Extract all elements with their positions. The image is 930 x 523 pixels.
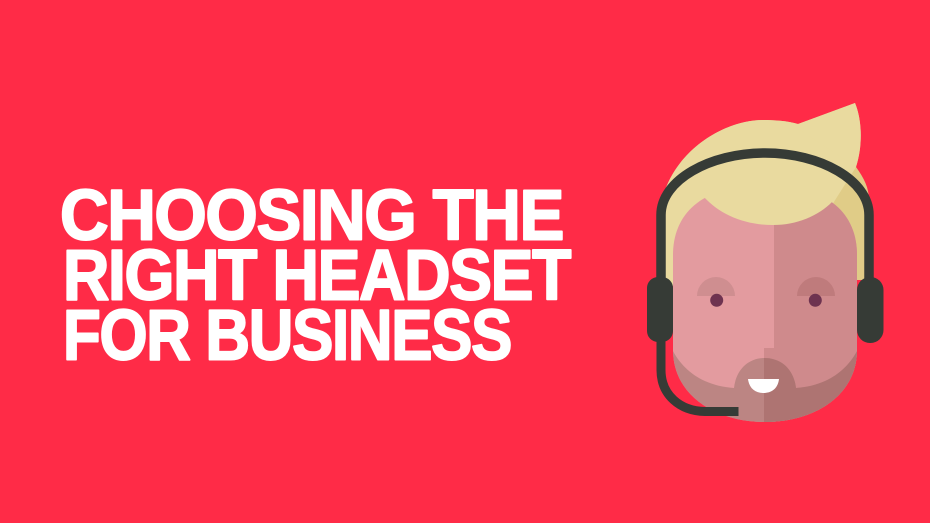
left eye [710, 294, 723, 307]
title: CHOOSING THE [60, 176, 563, 256]
right ear cup [857, 277, 884, 343]
beard [673, 352, 857, 422]
mouth [748, 379, 779, 393]
title: RIGHT HEADSET [63, 236, 571, 316]
back hair [661, 103, 869, 280]
banner [62, 103, 884, 422]
microphone boom [661, 335, 738, 412]
left ear cup [647, 277, 673, 342]
hair fringe [703, 130, 856, 225]
illustration: man wearing headset [647, 103, 884, 425]
left eyebrow [697, 277, 735, 296]
title [60, 176, 571, 376]
right eyebrow [797, 277, 835, 296]
right eye [809, 294, 822, 307]
face [673, 198, 857, 422]
headband [661, 153, 869, 285]
title: FOR BUSINESS [63, 296, 511, 376]
hair left side [661, 103, 861, 300]
